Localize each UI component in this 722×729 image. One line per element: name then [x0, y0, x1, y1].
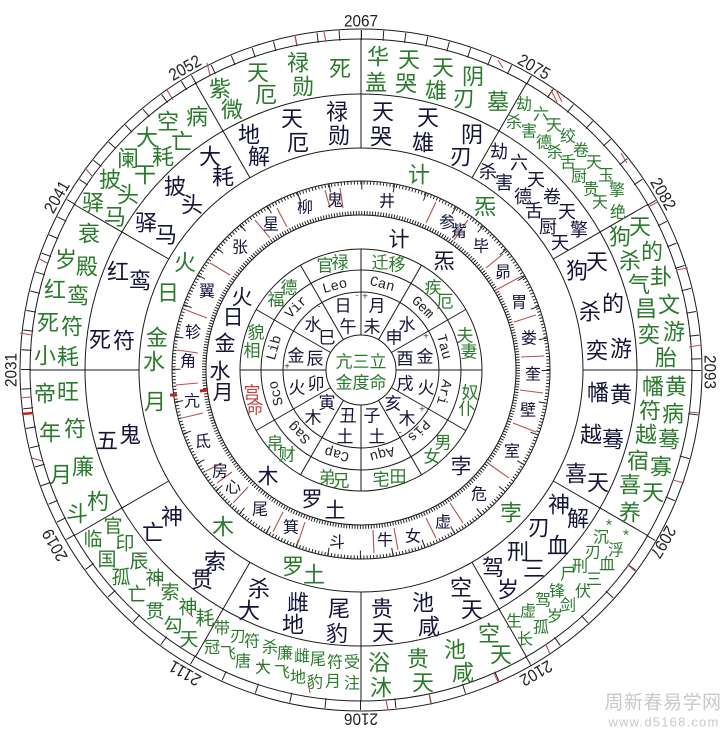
planets ring, green: 火日金水月 [143, 250, 196, 414]
zodiac sign labels: Can [368, 274, 396, 296]
planets ring, black: 计炁孛 [388, 228, 472, 478]
zodiac sign labels: Sag [285, 417, 315, 447]
red marker, lower left of outer ring [22, 413, 33, 414]
planets ring, black [210, 228, 472, 522]
outer ring stars: southwest [34, 380, 360, 692]
28 mansions names: 鬼柳星张翼轸角亢氐房心尾箕斗 [180, 192, 345, 552]
second ring stars: north half: 狗天杀的奕游 [566, 250, 632, 364]
28 mansions names: 井参觜毕昴胃娄奎壁室危虚女牛 [377, 192, 541, 550]
year label 2067: 2067 [344, 12, 378, 30]
second ring stars: south half: 空天池咸贵天 [371, 576, 483, 646]
earthly branches and planets [288, 296, 434, 446]
zodiac sign labels: Aqu [368, 442, 396, 464]
year label 2052: 2052 [166, 51, 204, 85]
zodiac sign labels: Pis [403, 415, 433, 445]
zodiac sign labels: Gem [407, 293, 437, 323]
outer ring stars: northwest: 衰岁殿红鸾死符小耗 [34, 222, 100, 370]
outer ring stars: north and northeast: 华盖天哭天雄阴刃墓 [365, 44, 509, 114]
outer ring stars: northwest: 死禄勋天厄紫微 [209, 50, 351, 122]
small plus and minus marks: - [355, 290, 359, 302]
zodiac sign labels: Vir [282, 293, 312, 323]
year label 2111: 2111 [166, 656, 204, 690]
outer ring stars: east and southeast [368, 374, 687, 700]
planets ring, black: 火日金水月木罗土 [210, 286, 346, 522]
earthly branches and planets: 日午月未水巳水申 [304, 296, 416, 348]
outer ring stars: north and northeast [365, 44, 685, 370]
small plus and minus marks: ++++ [284, 292, 429, 416]
outer ring stars: southwest: 官临印国辰孤神亡索贯神勾耗天 [83, 516, 215, 650]
outer ring stars: southwest: 带刃冠符飞杀唐廉大雌飞尾地符豹受月注 [204, 620, 360, 692]
earthly branches and planets: 金辰酉金火卯戌火 [288, 346, 434, 398]
twelve palace names: 官禄迁移疾厄夫妻奴仆 [316, 254, 478, 418]
zodiac sign labels: Leo [321, 276, 349, 298]
outer ring stars: east and southeast: **沉浮刃血刑三尸伏锋剑驾岁虚孤生长 [506, 518, 629, 648]
center life text [336, 352, 386, 392]
small plus and minus marks: -- [317, 302, 402, 438]
year label 2097: 2097 [646, 523, 680, 561]
28 mansions red boundary lines [176, 188, 544, 553]
life palace label, red: 宫命 [244, 384, 264, 418]
second ring stars: south half [96, 380, 632, 646]
28 mansions ring degree scale [174, 183, 548, 557]
year label 2075: 2075 [515, 50, 553, 84]
center life text: 亢三立 [336, 352, 386, 372]
outer ring stars: north and northeast: 天狗的杀卦气文昌游奕胎 [609, 214, 685, 370]
outer ring stars: northwest: 病空亡大耗阑干披头驿马 [82, 104, 208, 230]
second ring stars: south half: 幡黄越蓦喜天神解刃血刑三驾岁 [482, 380, 632, 602]
year label 2093: 2093 [700, 355, 720, 389]
zodiac sign labels: Cap [323, 442, 351, 464]
outer ring stars: east and southeast: 黄幡病符蓦越寡宿天喜养 [619, 374, 687, 526]
outer ring stars: east and southeast: 空天池咸贵天浴沐 [368, 622, 512, 700]
zodiac sign labels: Sco [266, 379, 288, 407]
year label 2106: 2106 [344, 710, 378, 728]
year label 2019: 2019 [38, 526, 72, 564]
second ring stars: north half: 天哭天雄阴刃 [370, 100, 483, 170]
year label 2031: 2031 [2, 353, 20, 387]
second ring stars: south half: 尾豹雌地杀大索贯神亡鬼五 [96, 422, 350, 646]
earthly branches and planets: 木寅亥木丑土子土 [304, 394, 416, 446]
second ring stars: north half [89, 100, 632, 364]
second ring stars: north half: 劫杀六害天德卷舌天厨擎天 [479, 142, 588, 253]
thick red markers at Kang mansion [170, 390, 208, 395]
zodiac sign labels: Lib [264, 334, 286, 362]
planets ring, green: 计炁孛木罗土 [212, 162, 522, 588]
year label 2041: 2041 [40, 178, 74, 216]
zodiac sign labels: Ari [432, 378, 454, 406]
year label 2082: 2082 [646, 175, 680, 213]
outer ring stars: north and northeast: 劫杀六害天德绞杀卷舌天厨玉贵擎天绝 [506, 96, 626, 222]
year label 2102: 2102 [517, 656, 555, 690]
watermark [604, 692, 722, 729]
watermark: 周新春易学网 [604, 692, 722, 714]
outer ring stars: northwest [34, 50, 351, 370]
zodiac sign labels [264, 274, 454, 464]
28 mansions names [180, 192, 541, 552]
outer ring stars: southwest: 旺帝符年廉月杓斗 [34, 380, 109, 526]
second ring stars: north half: 禄勋天厄地解大耗披头驿马红鸾死符 [89, 100, 350, 354]
center life text: 金度命 [336, 374, 386, 392]
twelve palace names: 男女田宅兄弟财帛相貌福德 [244, 278, 452, 490]
inner palace sector dividers [240, 249, 482, 491]
zodiac sign labels: Tau [432, 333, 454, 361]
